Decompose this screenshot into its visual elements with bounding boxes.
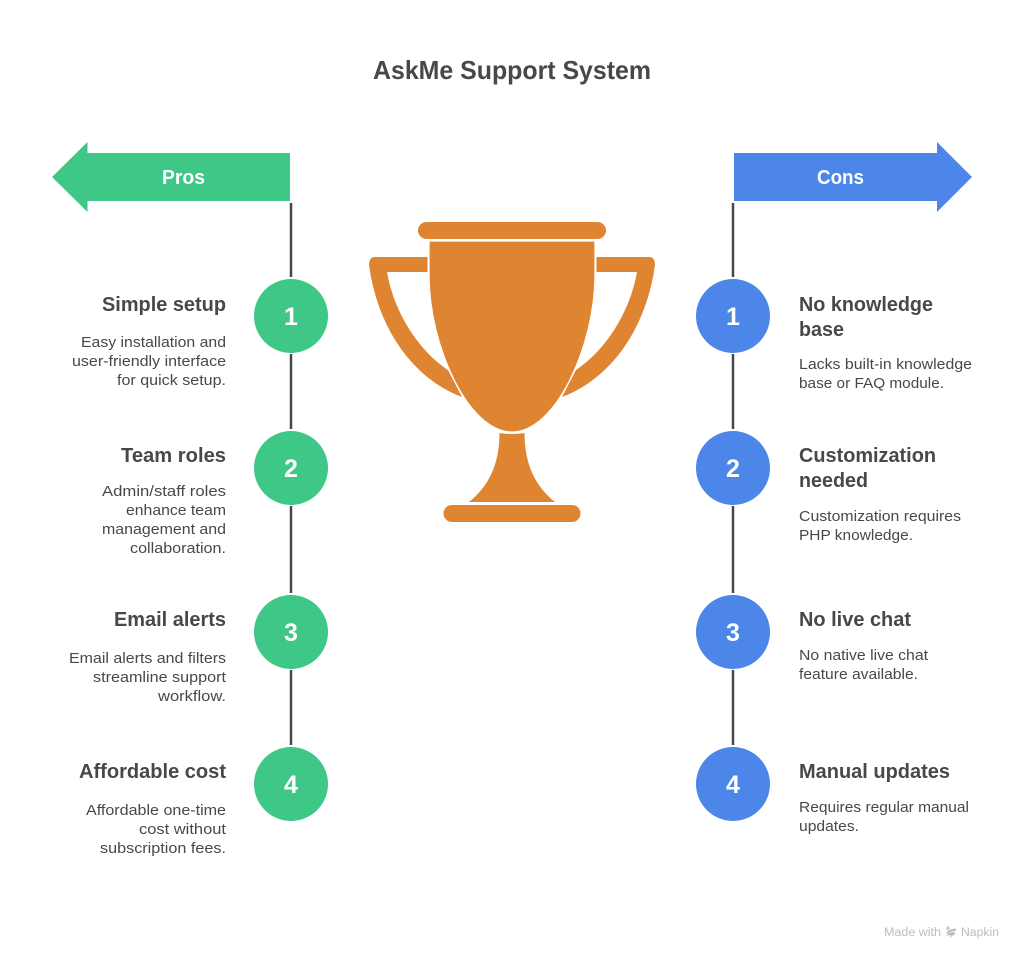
text: manual updates: Manual updates: [799, 761, 950, 783]
arrow: cons header: Cons: [817, 167, 864, 189]
text: customization needed: Customization requires: [799, 508, 961, 525]
icon: trophy: [369, 222, 655, 522]
text: no knowledge base: base: [799, 319, 844, 341]
text: email alerts: streamline support: [93, 669, 227, 686]
text: no live chat: No native live chat: [799, 647, 929, 664]
text: team roles: collaboration.: [130, 540, 226, 557]
text: simple setup: Simple setup: [102, 294, 226, 316]
text: email alerts: workflow.: [157, 688, 226, 705]
text: manual updates: [799, 761, 969, 835]
timeline: cons: 1: [726, 303, 740, 331]
text: affordable cost: Affordable one-time: [86, 802, 226, 819]
timeline: pros: 4: [284, 771, 298, 799]
text: customization needed: Customization: [799, 445, 936, 467]
text: customization needed: needed: [799, 470, 868, 492]
timeline: cons: 2: [726, 455, 740, 483]
text: team roles: Admin/staff roles: [102, 483, 226, 500]
title: AskMe Support System: [373, 55, 651, 85]
text: affordable cost: [79, 761, 227, 857]
text: manual updates: updates.: [799, 818, 859, 835]
panel: pros: [52, 142, 328, 857]
text: email alerts: Email alerts and filters: [69, 650, 226, 667]
text: team roles: Team roles: [121, 445, 226, 467]
timeline: pros: 2: [284, 455, 298, 483]
footer: made with napkin: [884, 926, 999, 939]
text: affordable cost: cost without: [139, 821, 227, 838]
text: simple setup: for quick setup.: [117, 372, 226, 389]
text: no knowledge base: Lacks built-in knowledge: [799, 356, 972, 373]
timeline: cons: 3: [726, 619, 740, 647]
text: affordable cost: subscription fees.: [100, 840, 226, 857]
text: team roles: [102, 445, 226, 557]
text: no live chat: feature available.: [799, 666, 918, 683]
arrow: pros header: [52, 142, 290, 212]
text: affordable cost: Affordable cost: [79, 761, 226, 783]
text: team roles: enhance team: [126, 502, 226, 519]
timeline: pros: 1: [284, 303, 298, 331]
text: no knowledge base: No knowledge: [799, 294, 933, 316]
text: no live chat: [799, 609, 929, 683]
footer: made with napkin: Made with: [884, 927, 941, 939]
timeline: pros: [254, 203, 328, 821]
text: email alerts: Email alerts: [114, 609, 226, 631]
text: team roles: management and: [102, 521, 226, 538]
arrow: pros header: Pros: [162, 167, 205, 189]
timeline: cons: [696, 203, 770, 821]
text: simple setup: Easy installation and: [81, 334, 226, 351]
text: customization needed: [799, 445, 961, 544]
text: customization needed: PHP knowledge.: [799, 527, 913, 544]
text: simple setup: user-friendly interface: [72, 353, 226, 370]
text: manual updates: Requires regular manual: [799, 799, 969, 816]
footer: made with napkin: Napkin: [961, 927, 999, 939]
text: no knowledge base: [799, 294, 972, 392]
timeline: cons: 4: [726, 771, 740, 799]
timeline: pros: 3: [284, 619, 298, 647]
text: email alerts: [69, 609, 227, 705]
text: no knowledge base: base or FAQ module.: [799, 375, 944, 392]
text: no live chat: No live chat: [799, 609, 911, 631]
text: simple setup: [72, 294, 226, 389]
arrow: cons header: [734, 142, 972, 212]
panel: cons: [696, 142, 972, 835]
